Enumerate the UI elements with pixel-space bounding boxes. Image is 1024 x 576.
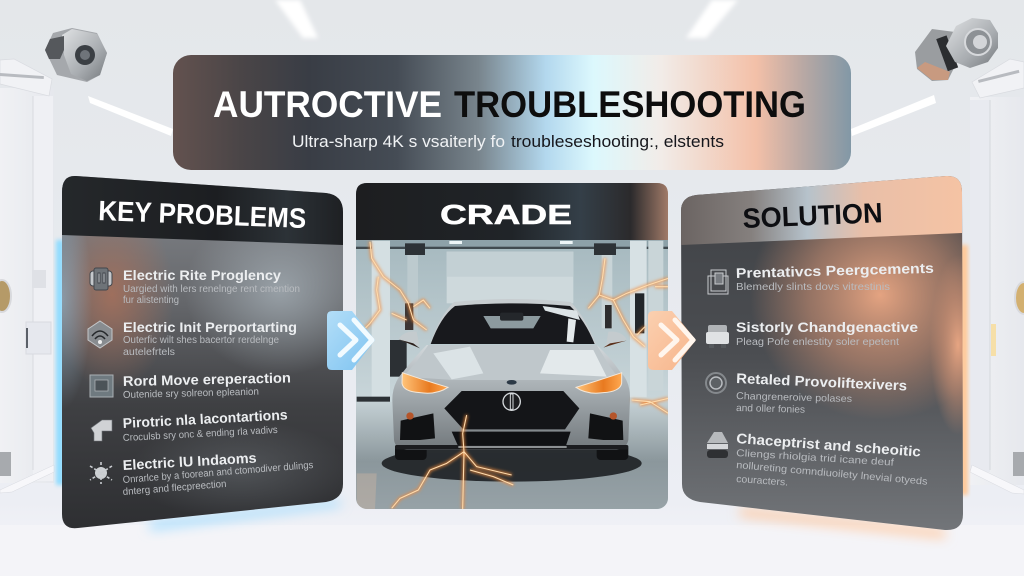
solution item 4: Chaceptrist and scheoitic — [736, 430, 922, 460]
icon: gear — [90, 462, 112, 484]
problem item 4: Croculsb sry onc & ending rla vadivs — [123, 425, 278, 444]
problem item 2: Electric Init Perportarting — [123, 319, 297, 335]
problem item 1: Uargied with lers renelnge rent cmention — [123, 284, 300, 295]
solution item 1: Blemedly slints dovs vitrestinis — [736, 282, 890, 293]
problem item 3 — [90, 369, 291, 401]
icon: control box — [90, 375, 113, 397]
solution item 3: and oller fonies — [736, 403, 805, 416]
problem item 5: Electric lU Indaoms — [122, 450, 257, 473]
solution item 3 — [706, 370, 908, 416]
icon: vehicle check — [707, 432, 728, 458]
center header bar — [356, 183, 668, 240]
lightning glow — [365, 242, 668, 509]
problem item 1: Electric Rite Proglency — [123, 267, 281, 283]
problem item 3: Rord Move ereperaction — [123, 369, 291, 389]
lightning bolts — [365, 242, 668, 509]
solution item 4: Cliengs rhiolgia trid icane deuf — [736, 448, 894, 469]
icon: fold arrow — [91, 420, 112, 441]
subtitle: Ultra-sharp 4K s vsaiterly fo — [292, 133, 505, 151]
problem item 2: autelefrtels — [123, 347, 175, 358]
panel: key problems — [62, 176, 343, 528]
icon: truck — [706, 325, 729, 348]
problem item 5 — [90, 450, 314, 498]
icon: engine — [90, 268, 112, 290]
title: AUTROCTIVE — [213, 84, 442, 125]
subtitle — [292, 133, 724, 151]
left equipment cabinet — [0, 59, 54, 493]
solution item 2 — [706, 319, 918, 348]
icon: dial — [706, 373, 726, 393]
subtitle: troubleseshooting:, elstents — [511, 133, 724, 151]
icon: document — [708, 270, 728, 294]
title — [213, 84, 806, 125]
problem item 1: fur alistenting — [123, 295, 179, 306]
right equipment cabinet — [970, 59, 1024, 494]
solution item 4: nollureting comndiuoilety lnevial otyeds — [736, 460, 928, 488]
solution item 1 — [708, 260, 934, 294]
problem item 5: Onrarlce by a foorean and ctomodiver dulings — [122, 460, 314, 486]
problem item 4: Pirotric nla lacontartions — [122, 406, 288, 431]
icon: left camera — [45, 28, 107, 82]
problem item 2: Outerfic wilt shes bacertor rerdelnge — [123, 335, 279, 346]
problem item 5: dnterg and flecpreection — [122, 479, 227, 498]
arrow: left chevron — [327, 311, 375, 370]
car photo scene — [356, 240, 669, 510]
solution item 4: couracters. — [736, 474, 788, 489]
panel glow — [56, 240, 968, 538]
panel: solution — [681, 176, 963, 530]
icon: signal badge — [88, 321, 112, 348]
solution item 4 — [707, 430, 928, 489]
problem item 2 — [88, 319, 297, 358]
solution item 2: Pleag Pofe enlestity soler epetent — [736, 337, 899, 348]
problem item 4 — [91, 406, 288, 444]
problem item 1 — [90, 267, 300, 306]
solution item 3: Changreneroive polases — [736, 391, 852, 405]
heading: solution: SOLUTION — [742, 197, 883, 234]
solution item 2: Sistorly Chandgenactive — [736, 319, 918, 335]
title: TROUBLESHOOTING — [454, 84, 806, 125]
problem item 3: Outenide sry solreon epleanion — [123, 387, 259, 401]
icon: right camera — [915, 18, 998, 81]
arrow: right chevron — [648, 311, 696, 370]
solution item 1: Prentativcs Peergcements — [736, 260, 934, 281]
solution item 3: Retaled Provoliftexivers — [736, 370, 908, 393]
heading: crade: CRADE — [440, 199, 572, 230]
heading: key problems: KEY PROBLEMS — [98, 195, 307, 234]
panel: title banner — [173, 55, 851, 170]
panel: center car — [356, 183, 669, 510]
